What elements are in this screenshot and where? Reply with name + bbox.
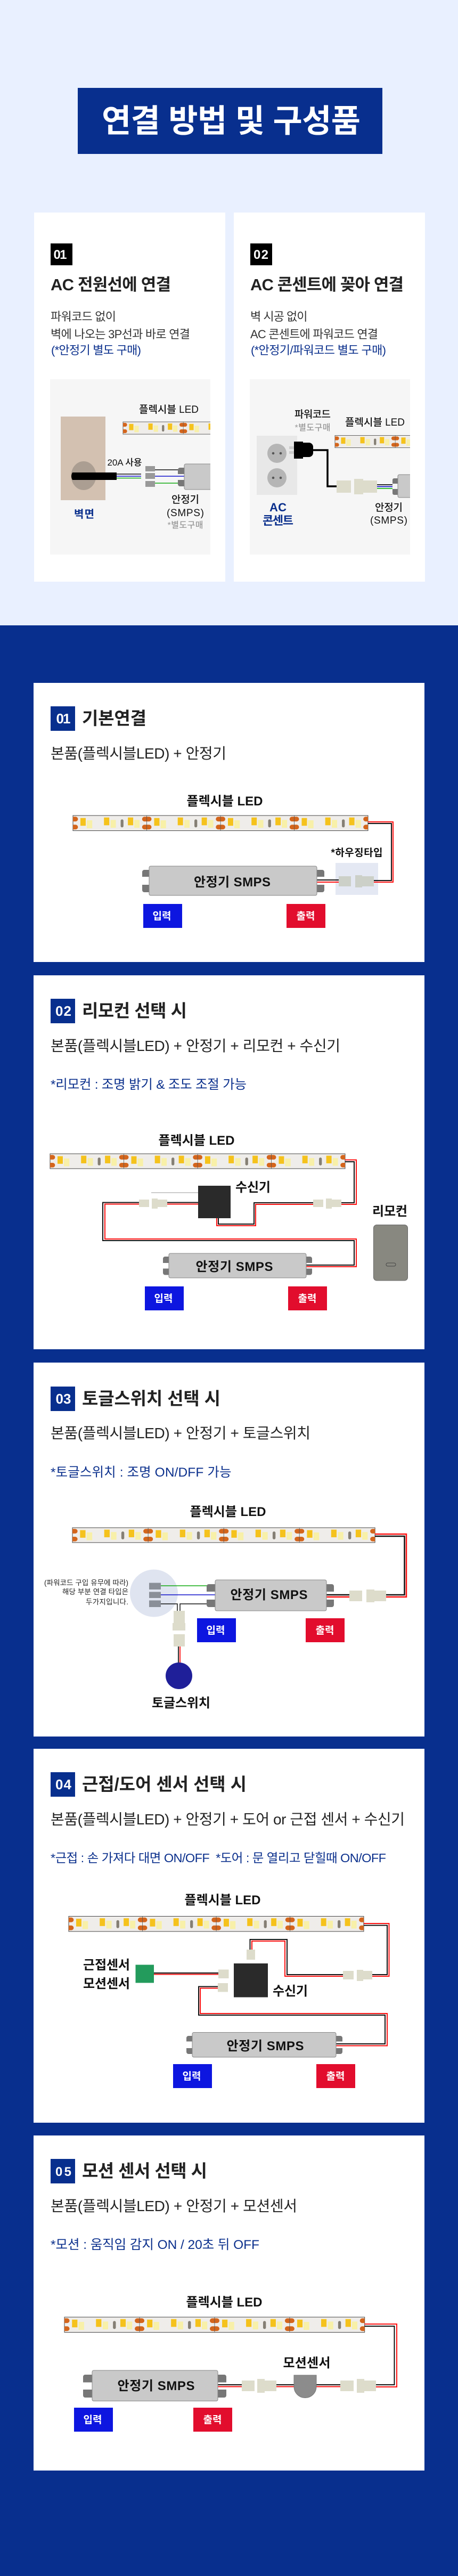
outlet: [257, 436, 297, 495]
parts list: 본품(플렉시블LED) + 안정기 + 모션센서: [51, 2198, 297, 2214]
parts list: 본품(플렉시블LED) + 안정기 + 도어 or 근접 센서 + 수신기: [51, 1811, 405, 1828]
heading: 기본연결: [82, 708, 146, 728]
highlight circle: [130, 1569, 178, 1617]
card description: 파워코드 없이: [51, 310, 116, 323]
toggle label: 토글스위치: [152, 1696, 210, 1710]
badge: 01: [56, 711, 70, 727]
LED strip: [64, 2317, 365, 2332]
remote: [374, 1225, 408, 1281]
output tag: 출력: [296, 910, 315, 922]
receiver: [198, 1186, 231, 1218]
output tag: [287, 904, 325, 928]
SMPS: [163, 1253, 312, 1278]
badge: 05: [55, 2165, 71, 2179]
note on connection type: 두가지입니다.: [86, 1598, 128, 1606]
wiring: [218, 2324, 397, 2387]
panel: 02 remote control: [34, 975, 424, 1349]
label outlet: AC: [269, 501, 287, 514]
LED strip: [334, 435, 410, 448]
heading: 모션 센서 선택 시: [82, 2161, 207, 2181]
connector right: [349, 1589, 386, 1602]
note on connection type: 해당 부분 연결 타입은: [62, 1588, 128, 1596]
card heading: AC 콘센트에 꽂아 연결: [250, 275, 404, 294]
housing highlight: [336, 863, 378, 895]
output tag: [316, 2064, 355, 2088]
LED strip: [50, 1154, 345, 1169]
card description: 벽 시공 없이: [250, 310, 308, 323]
panel: 04 proximity / door sensor: [34, 1749, 424, 2123]
card description: [250, 310, 386, 357]
connector: [337, 479, 377, 494]
input tag: 입력: [182, 2070, 201, 2082]
terminal connectors: [145, 466, 155, 487]
label power cord: 파워코드: [295, 409, 331, 420]
SMPS: 안정기 SMPS: [117, 2379, 195, 2393]
card description: [51, 310, 190, 357]
power cable: [71, 472, 141, 480]
receiver label: 수신기: [273, 1984, 308, 1999]
heading: 토글스위치 선택 시: [82, 1389, 220, 1408]
note: *토글스위치 : 조명 ON/DFF 가능: [51, 1465, 231, 1480]
LED label: 플렉시블 LED: [345, 417, 405, 428]
SMPS: 안정기 SMPS: [230, 1588, 308, 1602]
LED strip: [72, 1528, 375, 1543]
SMPS: [178, 463, 210, 490]
input tag: 입력: [83, 2414, 102, 2426]
card description: (*안정기/파워코드 별도 구매): [251, 344, 386, 357]
LED label: 플렉시블 LED: [186, 794, 263, 809]
diagram: wall wiring: [50, 379, 210, 555]
input tag: 입력: [154, 1293, 173, 1305]
badge: [51, 706, 75, 731]
motion sensor: [294, 2375, 316, 2398]
badge: [51, 999, 75, 1023]
plug: [289, 442, 313, 459]
LED label: 플렉시블 LED: [190, 1505, 266, 1519]
connector vertical: [173, 1611, 185, 1646]
SMPS: [186, 2033, 342, 2057]
power cord: [313, 450, 337, 486]
input tag: 입력: [207, 1625, 225, 1636]
label SMPS: [167, 494, 204, 530]
receiver: [234, 1963, 268, 1998]
SMPS: [207, 1580, 334, 1611]
top background: [0, 0, 458, 625]
card description: (*안정기 별도 구매): [51, 344, 141, 357]
wiring: [154, 1923, 389, 2045]
input tag: 입력: [152, 910, 171, 922]
terminal wires: [155, 470, 184, 483]
panel: 05 motion sensor: [34, 2135, 424, 2471]
badge 02: [250, 243, 272, 265]
label SMPS: *별도구매: [167, 520, 203, 530]
housing label: *하우징타입: [331, 847, 382, 859]
sensor labels: 모션센서: [83, 1977, 130, 1991]
label SMPS: (SMPS): [167, 508, 204, 519]
LED label: 플렉시블 LED: [186, 2295, 262, 2310]
connector right: [343, 1970, 372, 1981]
sensor: [135, 1964, 154, 1983]
sensor labels: 근접센서: [83, 1958, 130, 1972]
SMPS: [83, 2370, 226, 2401]
badge 01: 01: [53, 248, 67, 262]
note: *리모컨 : 조명 밝기 & 조도 조절 가능: [51, 1077, 247, 1092]
output wires: [317, 822, 393, 882]
receiver label: 수신기: [235, 1180, 271, 1195]
parts list: 본품(플렉시블LED) + 안정기 + 토글스위치: [51, 1425, 310, 1441]
motion sensor label: 모션센서: [283, 2356, 330, 2370]
LED label: 플렉시블 LED: [184, 1893, 261, 1907]
note: *모션 : 움직임 감지 ON / 20초 뒤 OFF: [51, 2237, 259, 2252]
SMPS: 안정기 SMPS: [227, 2039, 304, 2053]
card heading: AC 전원선에 연결: [51, 275, 171, 294]
note on connection type: [44, 1579, 128, 1606]
output tag: [288, 1286, 327, 1310]
heading: 근접/도어 센서 선택 시: [82, 1774, 247, 1794]
panel: AC power wire connection: [34, 213, 225, 582]
LED strip: [73, 816, 368, 831]
label SMPS: 안정기: [171, 494, 199, 506]
SMPS: 안정기 SMPS: [194, 875, 271, 890]
output tag: [193, 2408, 232, 2432]
badge: 04: [55, 1776, 72, 1792]
badge 02: 02: [253, 248, 268, 262]
card description: 벽에 나오는 3P선과 바로 연결: [51, 328, 190, 341]
toggle switch: [166, 1662, 192, 1689]
input tag: [197, 1618, 236, 1642]
parts list: 본품(플렉시블LED) + 안정기 + 리모컨 + 수신기: [51, 1038, 340, 1054]
heading: 리모컨 선택 시: [82, 1001, 187, 1021]
panel: 03 toggle switch: [34, 1363, 424, 1737]
receiver plugs: [218, 1950, 255, 1992]
parts list: 본품(플렉시블LED) + 안정기: [51, 745, 226, 762]
connector left: [139, 1199, 167, 1209]
badge: [51, 1387, 75, 1411]
output tag: 출력: [326, 2070, 345, 2082]
badge 01: [51, 243, 72, 265]
label SMPS: 안정기: [375, 502, 403, 513]
connector left: [242, 2379, 276, 2393]
output tag: 출력: [298, 1293, 316, 1305]
badge: 02: [55, 1003, 71, 1019]
wall: [61, 417, 105, 500]
LED strip: [122, 422, 210, 435]
SMPS: [142, 866, 324, 895]
diagram: outlet wiring: [250, 379, 410, 555]
toggle wire: [178, 1646, 180, 1664]
card description: AC 콘센트에 파워코드 연결: [250, 328, 378, 341]
wiring: [103, 1160, 356, 1267]
SMPS: [392, 474, 410, 498]
input tag: [173, 2064, 212, 2088]
LED strip: [69, 1917, 364, 1931]
note on connection type: (파워코드 구입 유무에 따라): [44, 1579, 128, 1587]
badge: 03: [55, 1391, 71, 1407]
terminal block: [149, 1583, 161, 1607]
lower navy background: [0, 625, 458, 2576]
connector right: [340, 2379, 376, 2393]
sensor labels: [83, 1958, 130, 1991]
input tag: [74, 2408, 113, 2432]
remote label: 리모컨: [372, 1204, 407, 1219]
label power cord: *별도구매: [295, 423, 330, 433]
title banner: 연결 방법 및 구성품: [102, 103, 361, 139]
label power cord: [295, 409, 331, 433]
input tag: [143, 904, 182, 928]
LED label: 플렉시블 LED: [159, 1134, 234, 1148]
LED label: 플렉시블 LED: [139, 404, 199, 415]
output tag: [306, 1618, 345, 1642]
title banner: [78, 88, 382, 154]
housing connector: [339, 875, 374, 887]
input tag: [145, 1286, 184, 1310]
SMPS: 안정기 SMPS: [196, 1260, 273, 1274]
label SMPS: [370, 502, 407, 526]
label SMPS: (SMPS): [370, 515, 407, 526]
output tag: 출력: [315, 1625, 334, 1636]
wires: [377, 485, 392, 488]
note: *근접 : 손 가져다 대면 ON/OFF *도어 : 문 열리고 닫힐때 ON/OFF: [51, 1851, 386, 1865]
panel: AC outlet connection: [234, 213, 425, 582]
label outlet: 콘센트: [263, 514, 293, 527]
output wiring: [326, 1534, 406, 1597]
connector right: [313, 1199, 341, 1209]
output tag: 출력: [203, 2414, 222, 2426]
input wiring: [161, 1586, 215, 1611]
label 20A: 20A 사용: [108, 458, 142, 468]
badge: [51, 1772, 75, 1797]
label outlet: [263, 501, 293, 527]
label wall: 벽면: [74, 508, 94, 520]
panel: 01 basic connection: [34, 683, 424, 962]
badge: [51, 2159, 75, 2183]
